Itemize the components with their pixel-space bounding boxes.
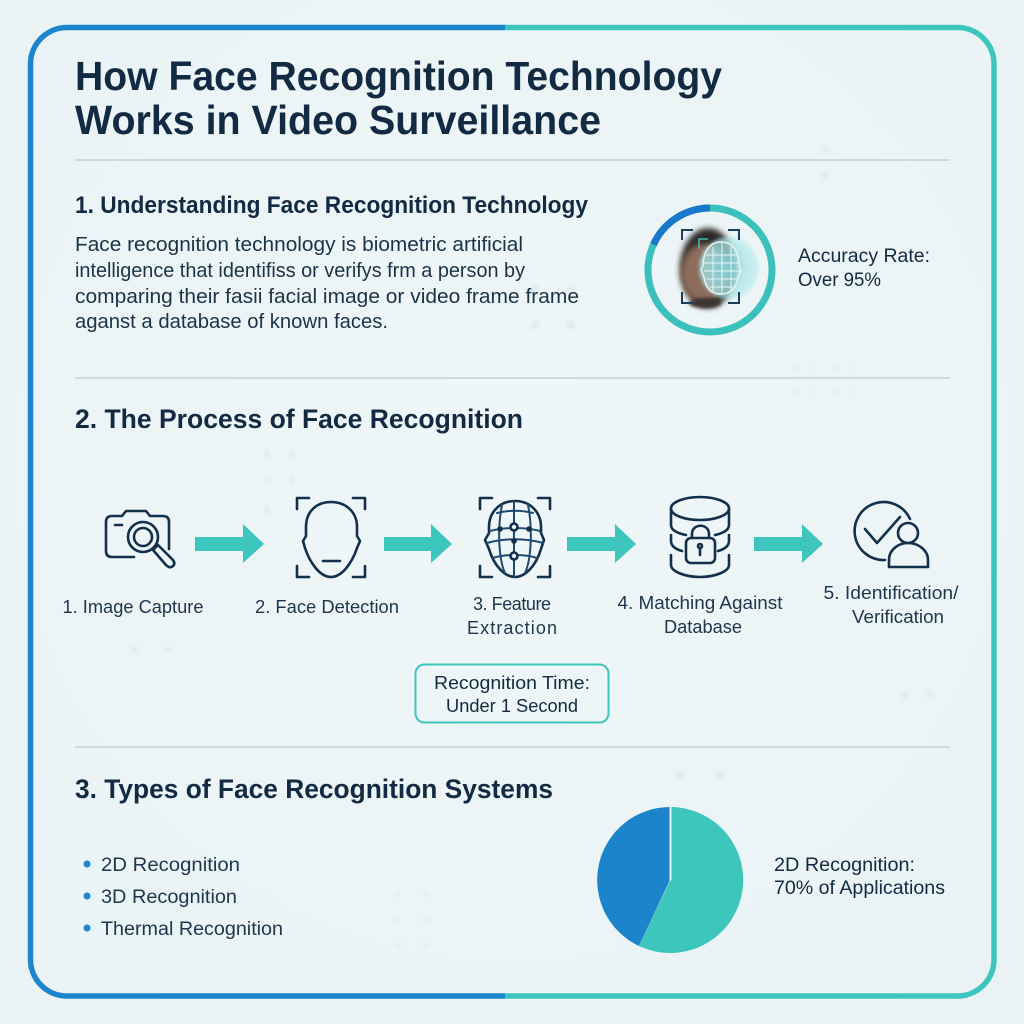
section 3 heading: 3. Types of Face Recognition Systems bbox=[75, 774, 553, 804]
section 1 heading: 1. Understanding Face Recognition Technology bbox=[75, 192, 588, 219]
arrow 2 bbox=[384, 524, 452, 563]
section 1 paragraph: intelligence that identifiss or verifys frm a person by bbox=[75, 259, 526, 282]
section 1 paragraph: aganst a database of known faces. bbox=[75, 310, 388, 333]
icon: camera with magnifier bbox=[106, 511, 174, 567]
step labels: 1. Image Capture bbox=[62, 597, 204, 617]
system types list: 3D Recognition bbox=[101, 887, 237, 908]
title: Works in Video Surveillance bbox=[75, 97, 601, 143]
recognition time callout: Recognition Time: bbox=[434, 673, 590, 693]
section 1 paragraph: comparing their fasii facial image or video frame frame bbox=[75, 285, 579, 308]
system types list: Thermal Recognition bbox=[101, 919, 283, 940]
step labels: 4. Matching Against bbox=[618, 593, 782, 613]
icon: face mesh bbox=[701, 242, 741, 294]
recognition time callout bbox=[416, 664, 608, 722]
icon: feature extraction mesh bbox=[480, 498, 550, 577]
arrow 4 bbox=[754, 524, 823, 563]
step labels bbox=[62, 583, 958, 638]
pie label bbox=[774, 855, 945, 899]
system types list bbox=[84, 855, 283, 940]
section 1 paragraph bbox=[75, 233, 579, 333]
section 1 paragraph: Face recognition technology is biometric artificial bbox=[75, 233, 523, 256]
pie chart bbox=[597, 807, 743, 953]
icon: verified person bbox=[855, 502, 928, 567]
step labels: Verification bbox=[852, 607, 944, 627]
icon: database with lock bbox=[671, 497, 729, 577]
icon: scan brackets bbox=[682, 230, 739, 303]
accuracy label: Over 95% bbox=[798, 270, 881, 291]
section 2 heading: 2. The Process of Face Recognition bbox=[75, 404, 523, 434]
icon: blurred face bbox=[680, 228, 759, 308]
arrow 1 bbox=[195, 524, 264, 563]
accuracy label: Accuracy Rate: bbox=[798, 246, 930, 267]
system types list: 2D Recognition bbox=[101, 855, 240, 876]
pie label: 2D Recognition: bbox=[774, 855, 915, 876]
accuracy ring with face scan bbox=[648, 208, 772, 332]
step labels: Extraction bbox=[467, 618, 557, 638]
step labels: 2. Face Detection bbox=[255, 597, 399, 617]
step labels: 5. Identification/ bbox=[824, 583, 958, 603]
title: How Face Recognition Technology bbox=[75, 53, 722, 99]
arrow 3 bbox=[567, 524, 636, 563]
recognition time callout: Under 1 Second bbox=[446, 696, 578, 716]
step labels: Database bbox=[664, 617, 742, 637]
icon: face detection bbox=[297, 498, 365, 577]
step labels: 3. Feature bbox=[473, 594, 551, 614]
pie label: 70% of Applications bbox=[774, 878, 945, 899]
title bbox=[75, 53, 722, 143]
accuracy label bbox=[798, 246, 930, 291]
